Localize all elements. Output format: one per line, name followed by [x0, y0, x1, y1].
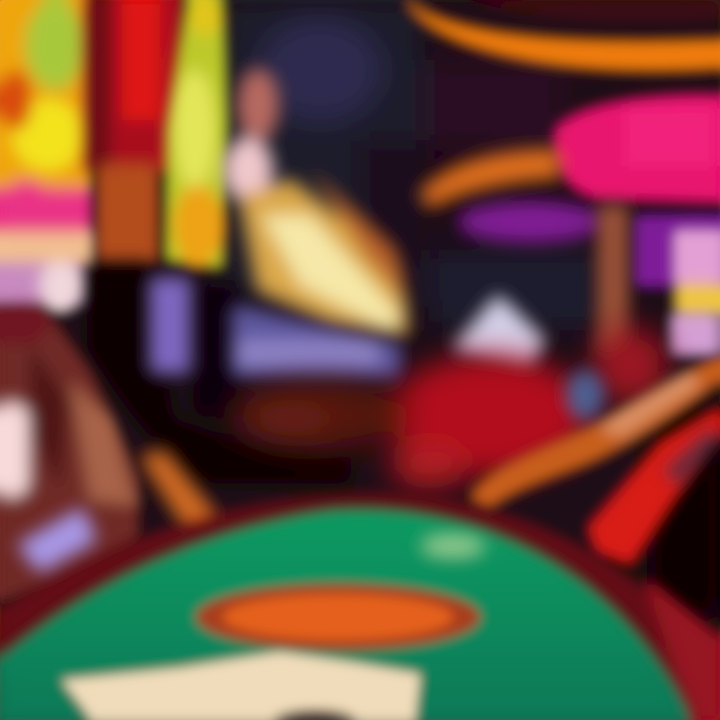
dark chip at bottom: [272, 710, 358, 720]
orange arm lower: [472, 358, 720, 506]
pink mushroom canopy: [557, 98, 720, 200]
purple panel right: [638, 218, 720, 284]
purple glow: [458, 202, 602, 242]
panel: red curtain: [85, 0, 180, 260]
orange oval on table: [196, 584, 480, 650]
black curtain base: [88, 262, 350, 482]
panel: left neon swirl: [0, 0, 90, 309]
lavender band: [150, 278, 400, 378]
figure: cream diagonal shape: [224, 69, 408, 335]
red mass: [230, 327, 668, 489]
dark navy backdrop: [225, 0, 720, 620]
felt highlight: [421, 534, 485, 558]
red guitar shape: [590, 410, 720, 562]
top-right orange arc: [405, 0, 720, 68]
white diamond: [452, 295, 544, 368]
right column: [598, 205, 628, 355]
table rim: [0, 496, 720, 720]
cream cards: [62, 652, 420, 720]
green felt table: [0, 511, 690, 720]
blue-grey accent: [567, 371, 603, 419]
panel: yellow-green column: [168, 0, 224, 266]
left lower figure: [0, 305, 136, 600]
right neon panel: [674, 232, 720, 352]
orange diagonal stick: [140, 450, 236, 558]
lavender chip: [18, 508, 96, 572]
orange arm: [420, 150, 560, 208]
